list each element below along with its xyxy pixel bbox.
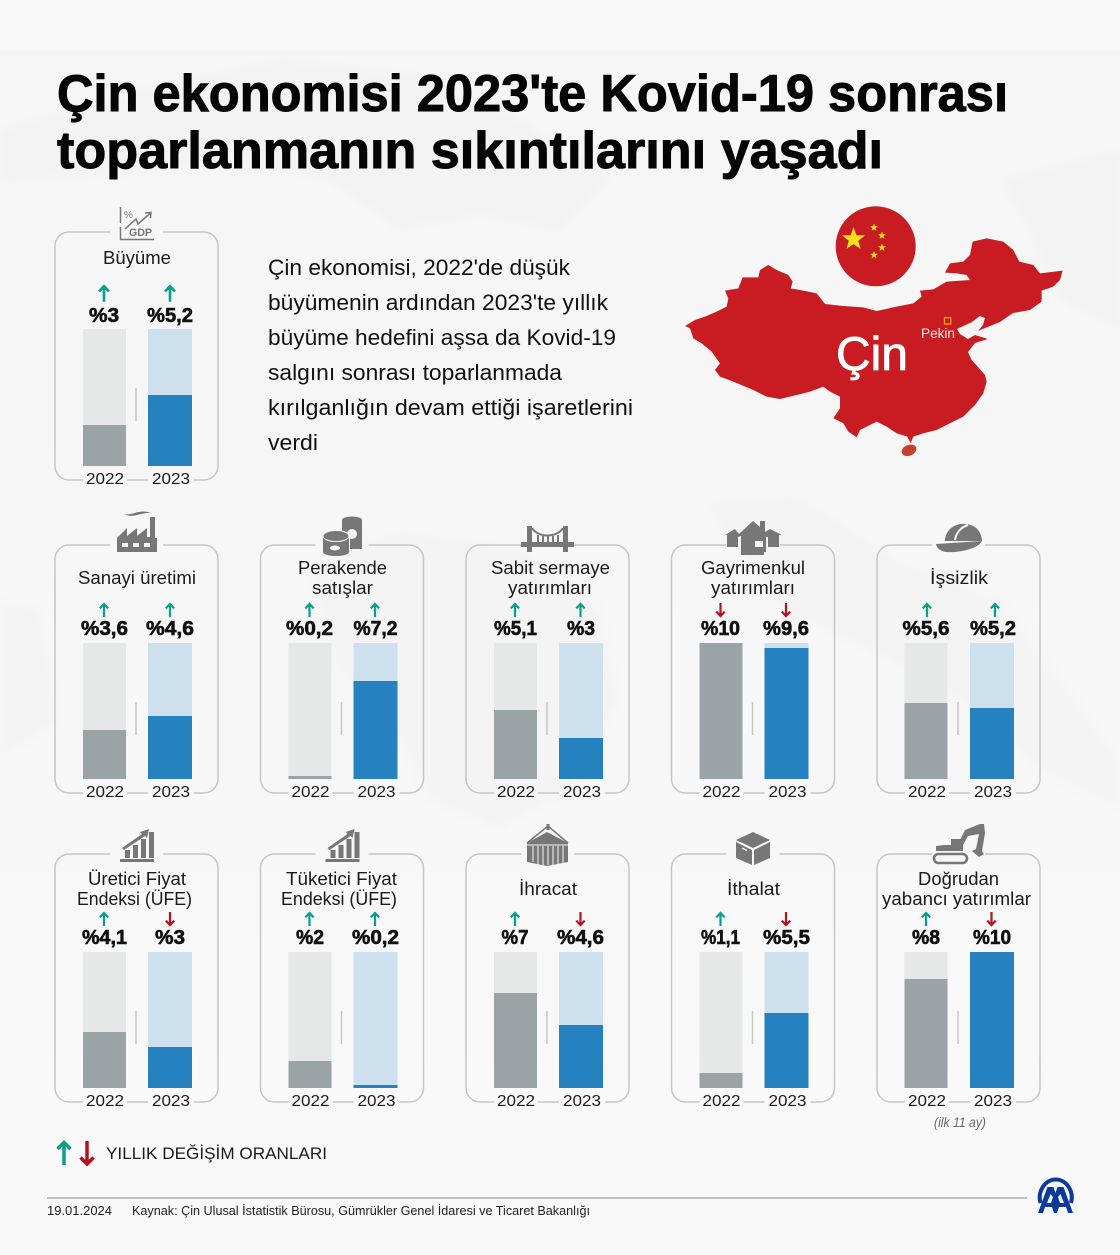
panel: Gayrimenkul yatırımları xyxy=(672,521,834,801)
panel: Üretici Fiyat Endeksi: 2023 xyxy=(152,1093,190,1110)
panel: İşsizlik: 2022 xyxy=(908,784,946,801)
intro text: Çin ekonomisi, 2022'de düşük xyxy=(268,255,571,280)
panel: Doğrudan yabancı yatırımlar: yabancı yatırımlar xyxy=(882,888,1031,909)
panel: Perakende satışlar: 2022 xyxy=(292,784,330,801)
panel: Tüketici Fiyat Endeksi: 2022 xyxy=(292,1093,330,1110)
footer: source: Kaynak: Çin Ulusal İstatistik Bürosu, Gümrükler Genel İdaresi ve Ticaret Bakanlığı xyxy=(132,1204,590,1218)
legend: YILLIK DEĞİŞİM ORANLARI xyxy=(106,1144,327,1163)
note: first 11 months: (ilk 11 ay) xyxy=(934,1114,986,1130)
intro text xyxy=(268,255,633,455)
panel: İhracat: 2023 xyxy=(563,1093,601,1110)
title: Çin ekonomisi 2023'te Kovid-19 sonrası xyxy=(57,65,1008,123)
icon: box xyxy=(736,832,770,865)
panel: Gayrimenkul yatırımları: yatırımları xyxy=(711,577,795,598)
icon: container xyxy=(527,824,568,866)
panel: Doğrudan yabancı yatırımlar: 2023 xyxy=(974,1093,1012,1110)
icon: GDP xyxy=(120,207,154,240)
panel: Tüketici Fiyat Endeksi: Endeksi (ÜFE) xyxy=(281,888,397,909)
panel: İşsizlik: 2023 xyxy=(974,784,1012,801)
panel: Sanayi üretimi: %4,6 xyxy=(146,618,194,640)
panel: Sabit sermaye yatırımları: %3 xyxy=(567,618,595,640)
panel: Doğrudan yabancı yatırımlar xyxy=(877,824,1040,1110)
footer: date: 19.01.2024 xyxy=(47,1204,112,1218)
map of China xyxy=(685,238,1063,458)
panel: Üretici Fiyat Endeksi xyxy=(55,829,218,1110)
logo: AA xyxy=(1038,1180,1073,1213)
panel: Sabit sermaye yatırımları: Sabit sermaye xyxy=(491,557,610,578)
icon: GDP: % xyxy=(124,210,133,221)
panel: Sabit sermaye yatırımları: 2022 xyxy=(497,784,535,801)
panel: Doğrudan yabancı yatırımlar: %10 xyxy=(973,927,1011,949)
panel: Büyüme: 2022 xyxy=(86,471,124,488)
icon: rising chart xyxy=(120,829,154,862)
panel: Üretici Fiyat Endeksi: %3 xyxy=(155,927,185,949)
icon: helmet xyxy=(936,524,982,552)
panel: Gayrimenkul yatırımları: Gayrimenkul xyxy=(701,557,805,578)
intro text: büyümenin ardından 2023'te yıllık xyxy=(268,290,609,315)
icon: houses xyxy=(725,521,782,555)
panel: Büyüme xyxy=(55,207,218,488)
panel: Sabit sermaye yatırımları: %5,1 xyxy=(494,618,537,640)
panel: Üretici Fiyat Endeksi: %4,1 xyxy=(82,927,127,949)
panel: Üretici Fiyat Endeksi: Endeksi (ÜFE) xyxy=(77,888,192,909)
title: toparlanmanın sıkıntılarını yaşadı xyxy=(57,122,883,180)
map of China: Pekin xyxy=(921,325,955,341)
map of China: Çin xyxy=(836,327,908,380)
panel: Doğrudan yabancı yatırımlar: 2022 xyxy=(908,1093,946,1110)
panel: Sanayi üretimi: %3,6 xyxy=(81,618,128,640)
panel: Sabit sermaye yatırımları xyxy=(466,526,629,801)
panel: Sanayi üretimi: Sanayi üretimi xyxy=(78,567,196,588)
flag of China xyxy=(836,206,916,286)
panel: Büyüme: Büyüme xyxy=(103,247,171,268)
panel: İhracat: 2022 xyxy=(497,1093,535,1110)
panel: Sanayi üretimi: 2023 xyxy=(152,784,190,801)
panel: İthalat xyxy=(672,832,834,1110)
panel: İşsizlik xyxy=(877,524,1040,801)
panel: İthalat: 2022 xyxy=(702,1093,741,1110)
icon: GDP: GDP xyxy=(129,227,152,239)
panel: Gayrimenkul yatırımları: 2023 xyxy=(768,784,807,801)
panel: Tüketici Fiyat Endeksi: %2 xyxy=(296,927,324,949)
intro text: salgını sonrası toparlanmada xyxy=(268,360,563,385)
intro text: büyüme hedefini aşsa da Kovid-19 xyxy=(268,325,616,350)
icon: cans xyxy=(323,516,362,556)
intro text: kırılganlığın devam ettiği işaretlerini xyxy=(268,395,633,420)
panel: İşsizlik: %5,6 xyxy=(902,618,950,640)
title xyxy=(57,65,1008,180)
icon: rising chart xyxy=(326,829,360,862)
panel: Sanayi üretimi xyxy=(55,512,218,801)
panel: Perakende satışlar: 2023 xyxy=(358,784,396,801)
icon: factory xyxy=(117,512,157,552)
intro text: verdi xyxy=(268,430,318,455)
panel: Doğrudan yabancı yatırımlar: Doğrudan xyxy=(918,868,999,889)
panel: Perakende satışlar: satışlar xyxy=(312,577,373,598)
panel: İşsizlik: %5,2 xyxy=(970,618,1016,640)
panel: İthalat: İthalat xyxy=(727,878,780,899)
icon: excavator xyxy=(934,824,985,863)
panel: Perakende satışlar xyxy=(260,516,424,801)
panel: Sanayi üretimi: 2022 xyxy=(86,784,124,801)
panel: Tüketici Fiyat Endeksi xyxy=(260,829,424,1110)
panel: İthalat: %5,5 xyxy=(763,927,810,949)
panel: Tüketici Fiyat Endeksi: Tüketici Fiyat xyxy=(286,868,397,889)
panel: Perakende satışlar: %0,2 xyxy=(286,618,333,640)
panel: Gayrimenkul yatırımları: %9,6 xyxy=(763,618,809,640)
panel: Perakende satışlar: Perakende xyxy=(298,557,387,578)
panel: Üretici Fiyat Endeksi: 2022 xyxy=(86,1093,124,1110)
panel: İthalat: 2023 xyxy=(768,1093,807,1110)
panel: İhracat: İhracat xyxy=(519,878,577,899)
panel: Doğrudan yabancı yatırımlar: %8 xyxy=(912,927,940,949)
panel: İhracat: %4,6 xyxy=(557,927,604,949)
icon: bridge xyxy=(521,526,574,552)
panel: İşsizlik: İşsizlik xyxy=(930,567,989,588)
legend xyxy=(58,1141,327,1165)
panel: Perakende satışlar: %7,2 xyxy=(354,618,398,640)
panel: Sabit sermaye yatırımları: 2023 xyxy=(563,784,601,801)
panel: Tüketici Fiyat Endeksi: 2023 xyxy=(358,1093,396,1110)
panel: İhracat: %7 xyxy=(502,927,528,949)
panel: İthalat: %1,1 xyxy=(701,927,740,949)
panel: Büyüme: 2023 xyxy=(152,471,190,488)
panel: Büyüme: %3 xyxy=(89,305,119,327)
panel: Büyüme: %5,2 xyxy=(147,305,193,327)
panel: Tüketici Fiyat Endeksi: %0,2 xyxy=(352,927,399,949)
panel: Sabit sermaye yatırımları: yatırımları xyxy=(508,577,592,598)
panel: Gayrimenkul yatırımları: 2022 xyxy=(702,784,741,801)
panel: Gayrimenkul yatırımları: %10 xyxy=(701,618,740,640)
panel: Üretici Fiyat Endeksi: Üretici Fiyat xyxy=(88,868,186,889)
panel: İhracat xyxy=(466,824,629,1110)
